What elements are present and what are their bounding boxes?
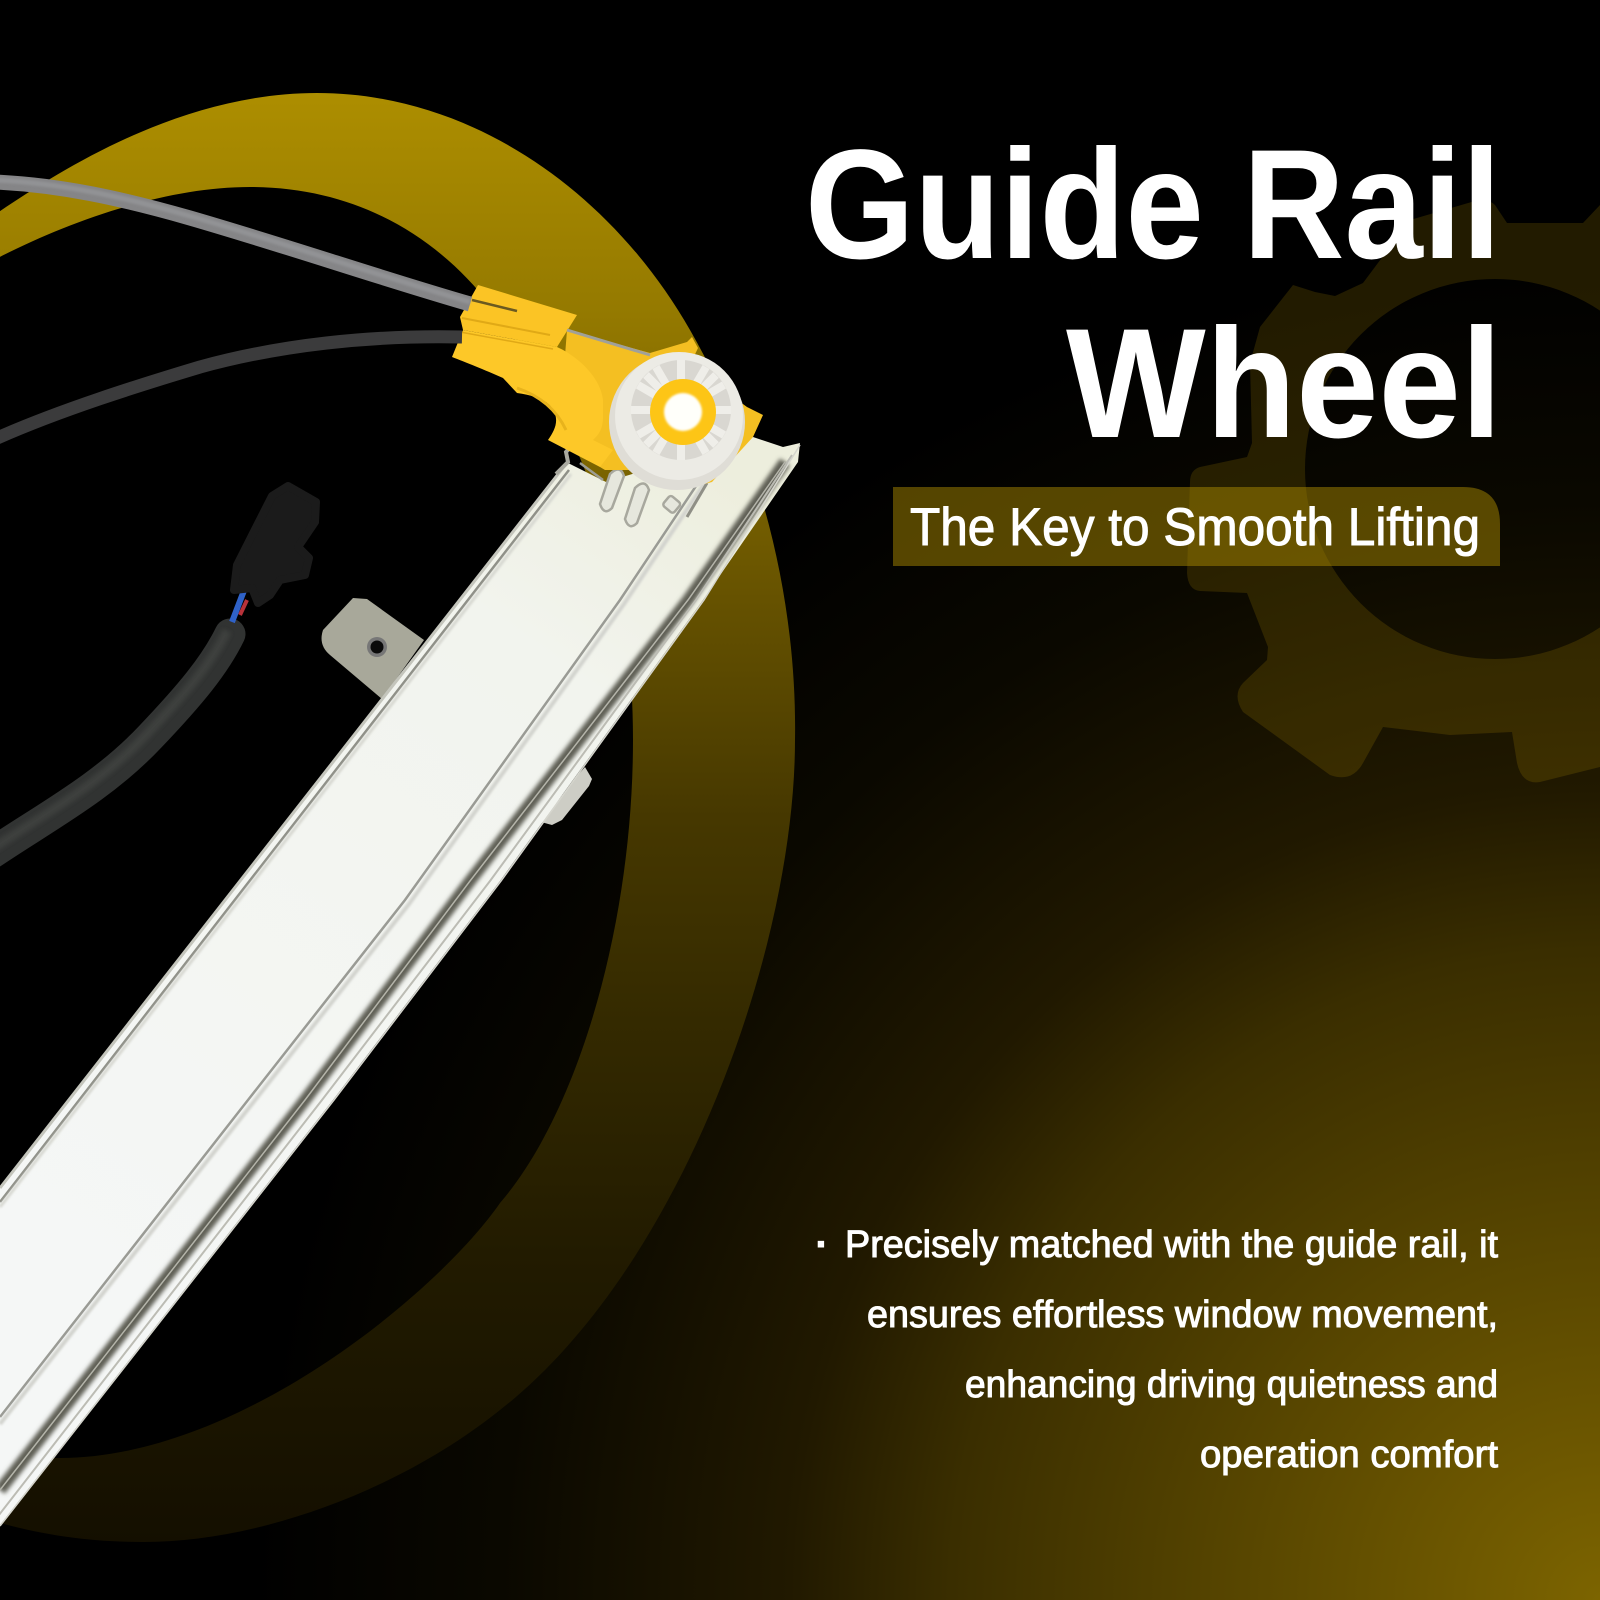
- product: thick black cable: [0, 631, 230, 858]
- product: metal guide rail: [0, 437, 800, 1531]
- title: Guide Rail Wheel: [805, 118, 1502, 471]
- title: Guide Rail Wheel: Wheel: [1066, 297, 1502, 471]
- description text: operation comfort: [1200, 1434, 1498, 1476]
- subtitle pill: The Key to Smooth Lifting: [910, 498, 1480, 557]
- description text: ·: [816, 1224, 828, 1266]
- description text: enhancing driving quietness and: [965, 1364, 1498, 1406]
- description text: ensures effortless window movement,: [867, 1294, 1498, 1336]
- product: black control cable: [0, 337, 462, 439]
- product: left mounting bracket: [322, 598, 424, 699]
- product: black connector: [234, 486, 316, 603]
- product: yellow slider block: [452, 285, 763, 488]
- decorative yellow ring: [0, 93, 795, 1542]
- decorative gear: [1187, 200, 1600, 782]
- description text: [816, 1224, 1498, 1476]
- left clip hook: [556, 443, 574, 474]
- product: rail slots: [600, 469, 681, 526]
- product: blue and red wires: [232, 580, 248, 622]
- product: right mounting bracket: [541, 767, 592, 825]
- title: Guide Rail Wheel: Guide Rail: [805, 118, 1501, 292]
- description text: Precisely matched with the guide rail, it: [845, 1224, 1498, 1266]
- product: white guide wheel: [609, 352, 745, 490]
- product: grey control cable: [0, 180, 470, 304]
